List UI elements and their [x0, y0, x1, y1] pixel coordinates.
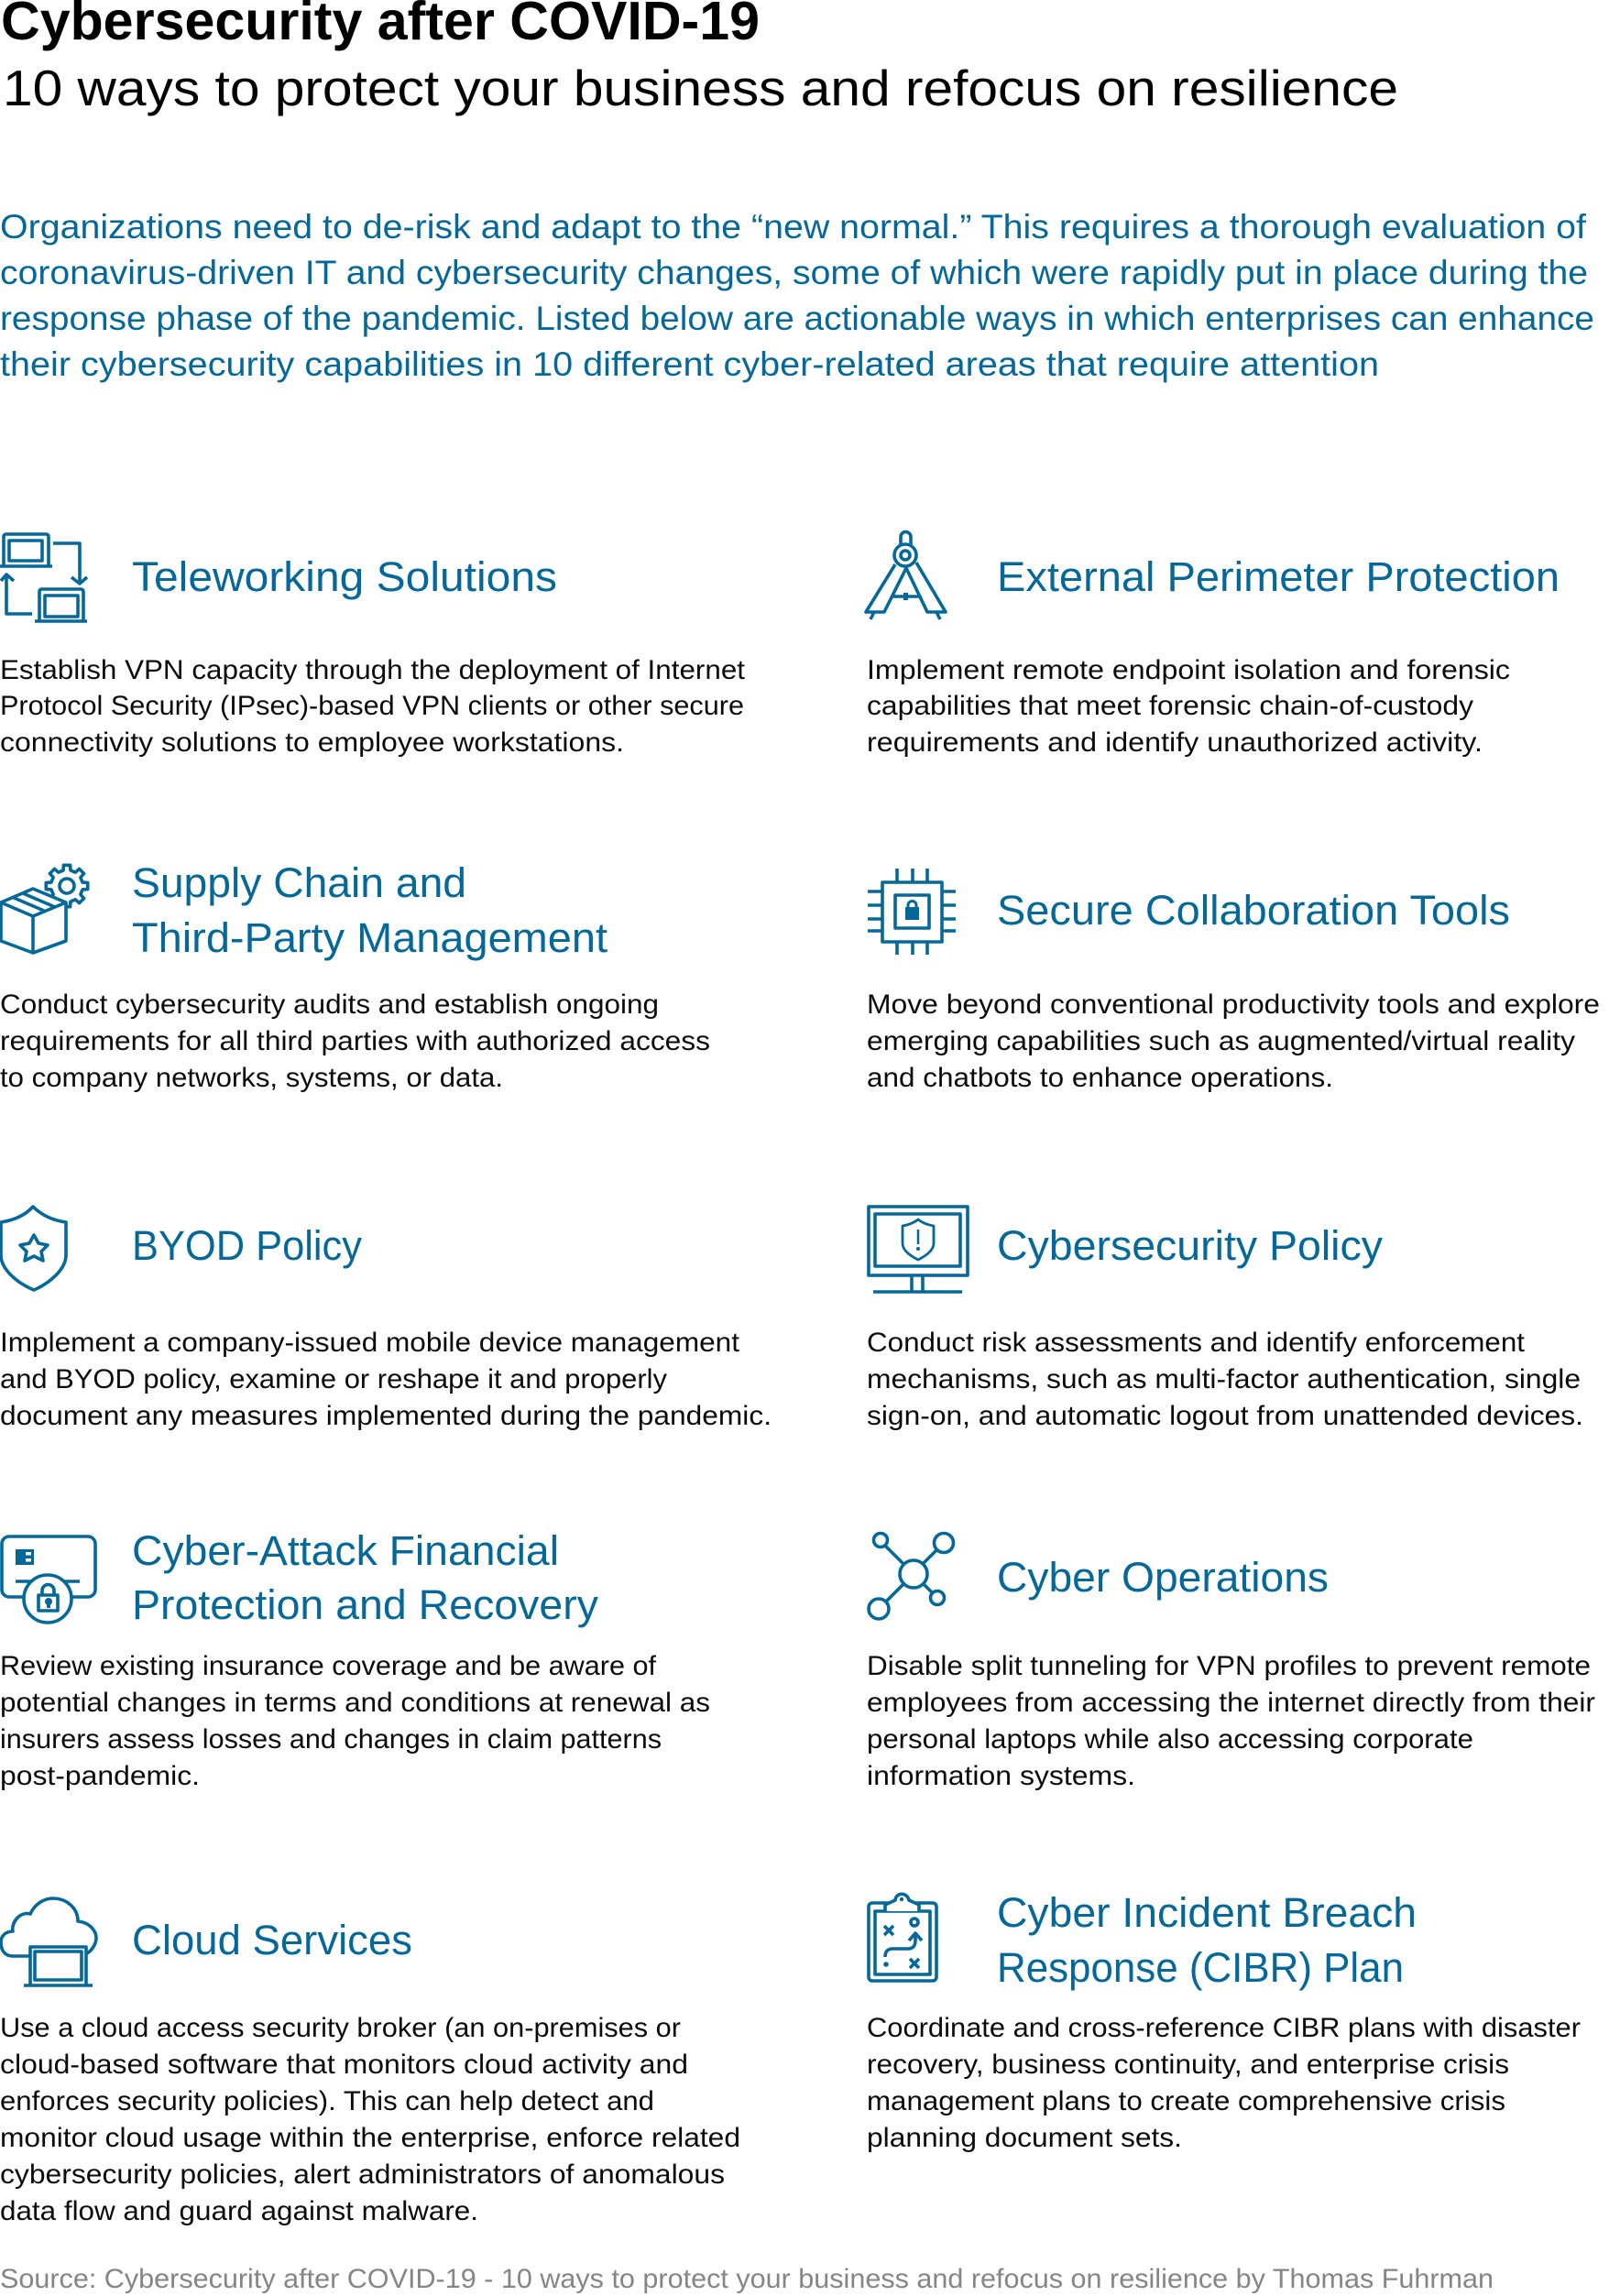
body text: cybersecurity policies, alert administrators of anomalous: [0, 2159, 725, 2190]
heading: Cyber-Attack Financial: [132, 1527, 559, 1574]
body text: Disable split tunneling for VPN profiles to prevent remote: [867, 1651, 1591, 1681]
body text: management plans to create comprehensive crisis: [867, 2086, 1505, 2116]
heading: [132, 1527, 599, 1628]
body text: connectivity solutions to employee workstations.: [0, 727, 624, 758]
body text: [867, 1651, 1595, 1791]
panel: secure collaboration tools: [867, 869, 1600, 1093]
heading: Response (CIBR) Plan: [997, 1944, 1404, 1991]
panel: cyber-attack financial protection and recovery: [0, 1527, 710, 1791]
body text: Implement remote endpoint isolation and forensic: [867, 655, 1510, 685]
body text: and BYOD policy, examine or reshape it and properly: [0, 1364, 667, 1394]
body text: Protocol Security (IPsec)-based VPN clients or other secure: [0, 691, 744, 721]
heading: Cloud Services: [132, 1917, 412, 1963]
heading: Protection and Recovery: [132, 1581, 599, 1628]
body text: Conduct risk assessments and identify enforcement: [867, 1328, 1526, 1358]
body text: data flow and guard against malware.: [0, 2196, 478, 2226]
intro paragraph: Organizations need to de-risk and adapt to the “new normal.” This requires a thorough evaluation of: [0, 208, 1587, 246]
heading: BYOD Policy: [132, 1222, 362, 1269]
icon: box with gear: [1, 865, 88, 953]
heading: Supply Chain and: [132, 859, 466, 906]
body text: to company networks, systems, or data.: [0, 1063, 503, 1093]
body text: [0, 989, 710, 1093]
intro paragraph: their cybersecurity capabilities in 10 different cyber-related areas that require attention: [0, 345, 1379, 383]
body text: cloud-based software that monitors cloud activity and: [0, 2050, 688, 2080]
source line: Source: Cybersecurity after COVID-19 - 10 ways to protect your business and refocus on resilience by Thomas Fuhrman: [0, 2264, 1494, 2294]
panel: cyber operations: [867, 1534, 1595, 1791]
body text: capabilities that meet forensic chain-of-custody: [867, 691, 1473, 721]
body text: planning document sets.: [867, 2123, 1182, 2153]
panel: cybersecurity policy: [867, 1207, 1583, 1431]
heading: Third-Party Management: [132, 914, 608, 961]
icon: monitor with shield: [869, 1207, 968, 1292]
panel: teleworking solutions: [0, 534, 746, 758]
body text: personal laptops while also accessing corporate: [867, 1724, 1473, 1755]
heading: [132, 859, 608, 961]
icon: shield with star: [1, 1207, 66, 1290]
icon: laptops with exchange arrows: [0, 534, 87, 621]
heading: [997, 1889, 1417, 1991]
heading: External Perimeter Protection: [997, 553, 1560, 600]
heading: Cybersecurity Policy: [997, 1222, 1384, 1269]
body text: document any measures implemented during the pandemic.: [0, 1401, 772, 1431]
icon: clipboard with play diagram: [869, 1894, 936, 1981]
icon: chip with lock: [868, 869, 956, 955]
subtitle: 10 ways to protect your business and refocus on resilience: [3, 60, 1398, 116]
body text: emerging capabilities such as augmented/virtual reality: [867, 1026, 1575, 1056]
body text: Use a cloud access security broker (an on-premises or: [0, 2013, 681, 2043]
heading: Cyber Operations: [997, 1554, 1329, 1601]
heading: Secure Collaboration Tools: [997, 887, 1510, 934]
panel: external perimeter protection: [866, 531, 1560, 758]
body text: [867, 2013, 1581, 2153]
body text: [867, 655, 1510, 758]
body text: Move beyond conventional productivity tools and explore: [867, 989, 1600, 1020]
body text: potential changes in terms and conditions at renewal as: [0, 1688, 710, 1718]
body text: Conduct cybersecurity audits and establish ongoing: [0, 989, 659, 1020]
panel: BYOD policy: [0, 1207, 772, 1431]
body text: and chatbots to enhance operations.: [867, 1063, 1333, 1093]
icon: card with lock: [2, 1536, 95, 1623]
intro paragraph: response phase of the pandemic. Listed below are actionable ways in which enterprises can enhance: [0, 300, 1594, 337]
intro paragraph: [0, 208, 1594, 383]
icon: network nodes: [869, 1534, 953, 1619]
body text: [867, 1328, 1583, 1431]
body text: [0, 1651, 710, 1791]
body text: employees from accessing the internet directly from their: [867, 1688, 1595, 1718]
icon: compass: [866, 531, 946, 619]
icon: cloud with laptop: [1, 1898, 96, 1985]
panel: supply chain and third-party management: [0, 859, 710, 1093]
panel: cyber incident breach response plan: [867, 1889, 1581, 2153]
body text: insurers assess losses and changes in claim patterns: [0, 1724, 662, 1755]
body text: recovery, business continuity, and enterprise crisis: [867, 2050, 1509, 2080]
body text: [0, 2013, 740, 2226]
panel: cloud services: [0, 1898, 740, 2226]
body text: requirements for all third parties with authorized access: [0, 1026, 710, 1056]
body text: Coordinate and cross-reference CIBR plans with disaster: [867, 2013, 1581, 2043]
body text: information systems.: [867, 1761, 1135, 1791]
body text: Review existing insurance coverage and be aware of: [0, 1651, 657, 1681]
body text: post-pandemic.: [0, 1761, 200, 1791]
heading: Cyber Incident Breach: [997, 1889, 1417, 1936]
body text: monitor cloud usage within the enterprise, enforce related: [0, 2123, 740, 2153]
body text: [867, 989, 1600, 1093]
body text: [0, 1328, 772, 1431]
body text: Establish VPN capacity through the deployment of Internet: [0, 655, 746, 685]
body text: enforces security policies). This can help detect and: [0, 2086, 654, 2116]
intro paragraph: coronavirus-driven IT and cybersecurity changes, some of which were rapidly put in place during the: [0, 254, 1588, 291]
body text: sign-on, and automatic logout from unattended devices.: [867, 1401, 1583, 1431]
body text: [0, 655, 746, 758]
heading: Teleworking Solutions: [132, 553, 557, 600]
body text: mechanisms, such as multi-factor authentication, single: [867, 1364, 1581, 1394]
body text: requirements and identify unauthorized activity.: [867, 727, 1483, 758]
body text: Implement a company-issued mobile device management: [0, 1328, 740, 1358]
